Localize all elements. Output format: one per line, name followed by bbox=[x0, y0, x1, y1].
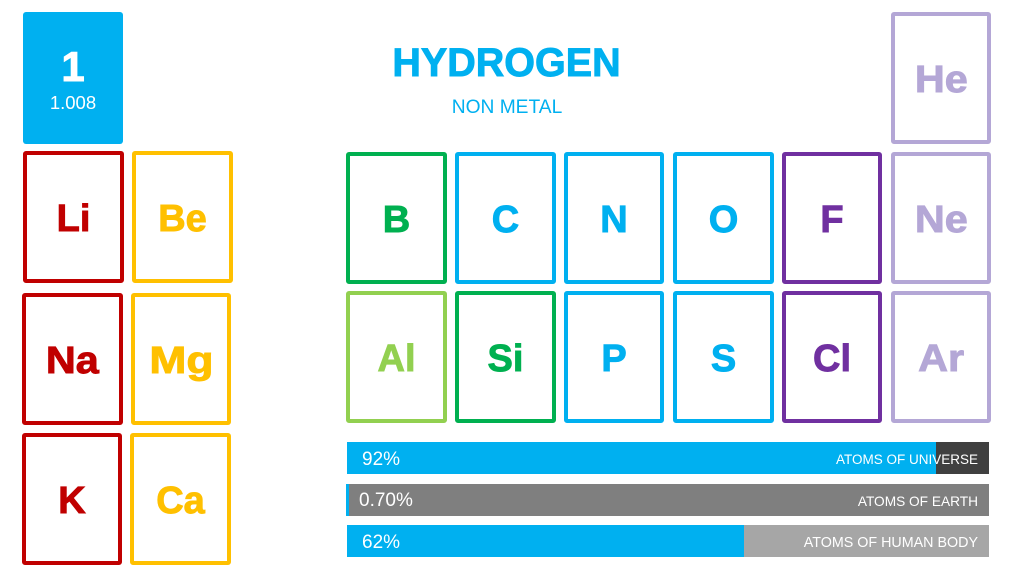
subtitle: NON METAL bbox=[452, 97, 562, 118]
element S: S bbox=[711, 338, 736, 380]
element S bbox=[673, 291, 774, 423]
element P bbox=[564, 291, 664, 423]
element F: F bbox=[820, 198, 844, 240]
bar: atoms of human body: ATOMS OF HUMAN BODY bbox=[804, 535, 978, 551]
element Li bbox=[23, 151, 124, 283]
element O bbox=[673, 152, 774, 284]
bar: atoms of earth: 0.70% bbox=[359, 490, 413, 511]
atomic mass: 1.008 bbox=[50, 92, 96, 113]
element Mg: Mg bbox=[149, 340, 213, 382]
element Ca bbox=[130, 433, 231, 565]
element C: C bbox=[492, 198, 519, 240]
element C bbox=[455, 152, 556, 284]
element K bbox=[22, 433, 122, 565]
bar: atoms of universe: 92% bbox=[362, 449, 400, 470]
hydrogen element tile bbox=[23, 12, 123, 144]
element Ar bbox=[891, 291, 991, 423]
element He: He bbox=[915, 58, 967, 100]
element Na: Na bbox=[46, 340, 99, 382]
element Si bbox=[455, 291, 556, 423]
element N: N bbox=[600, 198, 628, 240]
element Al: Al bbox=[378, 338, 416, 380]
element Ne: Ne bbox=[915, 198, 967, 240]
bar: atoms of universe: ATOMS OF UNIVERSE bbox=[836, 452, 978, 467]
element Ar: Ar bbox=[918, 338, 964, 380]
element Li: Li bbox=[57, 198, 90, 240]
bar: atoms of earth bbox=[346, 484, 989, 516]
element F bbox=[782, 152, 882, 284]
element Al bbox=[346, 291, 447, 423]
bar: atoms of earth: ATOMS OF EARTH bbox=[858, 494, 978, 509]
element Be: Be bbox=[158, 198, 207, 240]
bar: atoms of universe bbox=[347, 442, 989, 474]
element Cl: Cl bbox=[813, 338, 851, 380]
element B bbox=[346, 152, 447, 284]
element K: K bbox=[58, 480, 86, 522]
bar: atoms of human body bbox=[347, 525, 989, 557]
element He bbox=[891, 12, 991, 144]
atomic number: 1 bbox=[61, 43, 85, 90]
element B: B bbox=[383, 198, 410, 240]
element O: O bbox=[709, 198, 738, 240]
element P: P bbox=[601, 338, 627, 380]
element N bbox=[564, 152, 664, 284]
element Ne bbox=[891, 152, 991, 284]
element Be bbox=[132, 151, 233, 283]
element Mg bbox=[131, 293, 231, 425]
bar: atoms of human body: 62% bbox=[362, 532, 400, 553]
element Cl bbox=[782, 291, 882, 423]
element Na bbox=[22, 293, 123, 425]
element Si: Si bbox=[488, 338, 523, 380]
element Ca: Ca bbox=[156, 480, 205, 522]
title: HYDROGEN bbox=[392, 41, 621, 85]
